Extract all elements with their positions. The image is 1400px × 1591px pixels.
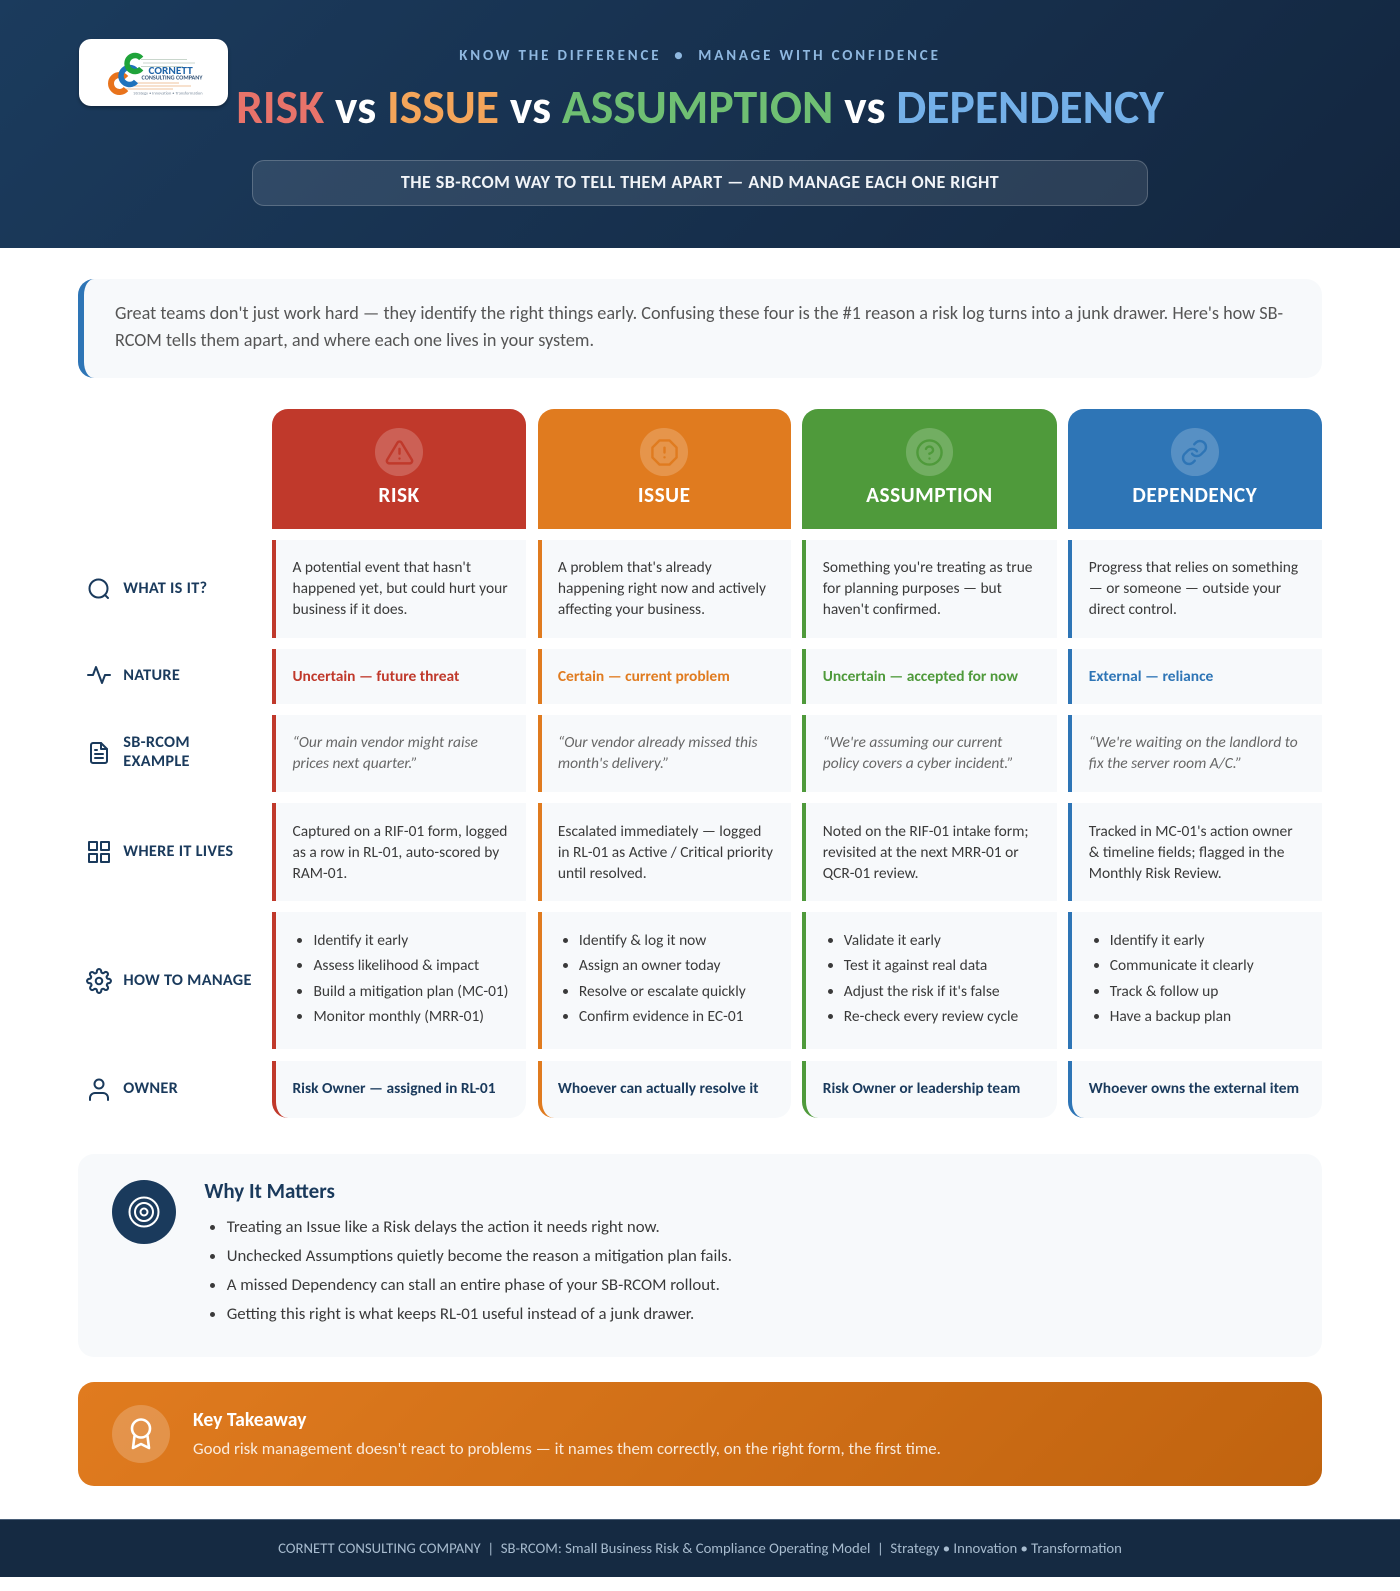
risk: how to manage: Assess likelihood & impact	[313, 956, 479, 975]
issue: owner	[538, 1061, 791, 1118]
issue: how to manage: Confirm evidence in EC-01	[579, 1007, 744, 1026]
assumption: how to manage: Adjust the risk if it's false	[844, 982, 1000, 1001]
heading: Why It Matters	[204, 1178, 335, 1204]
row label: Where it lives: WHERE IT LIVES	[123, 841, 233, 861]
row label: What is it?: WHAT IS IT?	[123, 578, 207, 598]
icon: document	[90, 742, 108, 764]
dependency: nature	[1068, 649, 1322, 704]
icon: target	[112, 1180, 176, 1244]
intro callout	[78, 278, 1322, 378]
risk: what is it	[272, 540, 526, 638]
dependency: nature: External — reliance	[1089, 667, 1213, 686]
assumption: where it lives: QCR-01 review.	[823, 864, 919, 883]
column header: Risk	[272, 408, 526, 529]
logo: Cornett Consulting Company: Strategy • Innovation • Transformation	[133, 92, 203, 96]
assumption: nature	[802, 649, 1057, 704]
row label: How to manage	[86, 968, 252, 994]
assumption: owner: Risk Owner or leadership team	[823, 1079, 1020, 1098]
assumption: what is it: haven't confirmed.	[823, 600, 941, 619]
row label: Where it lives	[88, 841, 233, 863]
dependency: example: “We're waiting on the landlord to	[1089, 733, 1298, 752]
icon: magnifier	[88, 578, 109, 599]
issue: how to manage: Identify & log it now	[579, 931, 706, 950]
assumption: where it lives: revisited at the next MRR-01 or	[823, 843, 1019, 862]
issue: example: “Our vendor already missed this	[558, 733, 758, 752]
dependency: how to manage: Have a backup plan	[1110, 1007, 1231, 1026]
issue: where it lives	[538, 803, 791, 901]
footer	[0, 1519, 1400, 1577]
row label: SB-RCOM example	[90, 732, 190, 771]
risk: owner	[272, 1061, 526, 1118]
panel: why it matters	[78, 1154, 1322, 1357]
issue: where it lives: in RL-01 as Active / Critical priority	[558, 843, 773, 862]
assumption: example: policy covers a cyber incident.”	[823, 754, 1014, 773]
dependency: where it lives: Tracked in MC-01's action owner	[1089, 822, 1293, 840]
heading: Key Takeaway	[193, 1408, 306, 1432]
dependency: what is it: — or someone — outside your	[1089, 579, 1281, 598]
risk: where it lives: as a row in RL-01, auto-scored by	[292, 843, 499, 862]
panel: key takeaway	[78, 1382, 1322, 1486]
issue: where it lives: Escalated immediately — logged	[558, 822, 761, 840]
dependency: where it lives: Monthly Risk Review.	[1089, 864, 1222, 883]
issue: nature	[538, 649, 791, 704]
icon: question circle	[906, 428, 953, 476]
assumption: what is it	[802, 540, 1057, 638]
assumption: what is it: Something you're treating as true	[823, 558, 1032, 577]
risk: what is it: A potential event that hasn't	[292, 558, 471, 577]
row label: SB-RCOM example: EXAMPLE	[123, 751, 190, 771]
bullet list	[210, 1216, 732, 1324]
dependency: where it lives	[1068, 803, 1322, 901]
risk: how to manage: Build a mitigation plan (MC-01)	[313, 982, 508, 1001]
dependency: owner	[1068, 1061, 1322, 1118]
header banner	[0, 0, 1400, 248]
icon: activity pulse	[87, 666, 111, 684]
row label: How to manage: HOW TO MANAGE	[123, 970, 252, 990]
assumption: how to manage: Test it against real data	[844, 956, 987, 975]
assumption: where it lives	[802, 803, 1057, 901]
risk: example: prices next quarter.”	[292, 754, 418, 773]
logo: Cornett Consulting Company	[78, 39, 228, 106]
issue: how to manage	[538, 912, 791, 1049]
issue: owner: Whoever can actually resolve it	[558, 1079, 758, 1098]
logo: Cornett Consulting Company: CORNETT	[148, 64, 193, 78]
assumption: example: “We're assuming our current	[823, 733, 1002, 752]
risk: how to manage: Monitor monthly (MRR-01)	[313, 1007, 484, 1026]
risk: what is it: happened yet, but could hurt your	[292, 579, 508, 598]
issue: what is it: affecting your business.	[558, 600, 705, 619]
assumption: where it lives: Noted on the RIF-01 intake form;	[823, 822, 1029, 840]
risk: example	[272, 715, 526, 792]
row label: Nature: NATURE	[123, 664, 180, 684]
icon: award ribbon	[112, 1405, 170, 1463]
assumption: how to manage: Re-check every review cycle	[844, 1007, 1018, 1026]
main title: RISK vs ISSUE vs ASSUMPTION vs DEPENDENCY	[236, 78, 1164, 136]
column header: Dependency	[1068, 408, 1322, 529]
assumption: how to manage	[802, 912, 1057, 1049]
row label: What is it?	[88, 578, 207, 599]
icon: warning triangle	[375, 428, 423, 476]
dependency: how to manage: Track & follow up	[1110, 982, 1218, 1001]
assumption: how to manage: Validate it early	[844, 931, 941, 950]
column header: Assumption	[802, 408, 1057, 529]
bullet list: Treating an Issue like a Risk delays the action it needs right now.	[227, 1216, 660, 1237]
bullet list: Unchecked Assumptions quietly become the reason a mitigation plan fails.	[227, 1245, 732, 1266]
dependency: example: fix the server room A/C.”	[1089, 754, 1242, 773]
dependency: what is it	[1068, 540, 1322, 638]
bullet list: Getting this right is what keeps RL-01 useful instead of a junk drawer.	[227, 1303, 694, 1324]
issue: how to manage: Assign an owner today	[579, 956, 720, 975]
assumption: nature: Uncertain — accepted for now	[823, 667, 1018, 686]
column header: Assumption: ASSUMPTION	[866, 482, 993, 508]
issue: nature: Certain — current problem	[558, 667, 730, 686]
risk: how to manage	[272, 912, 526, 1049]
dependency: what is it: Progress that relies on something	[1089, 558, 1298, 577]
icon: alert octagon	[640, 428, 688, 476]
kicker line: KNOW THE DIFFERENCE ● MANAGE WITH CONFIDENCE	[459, 47, 941, 65]
row label: Nature	[87, 664, 180, 684]
intro callout: Great teams don't just work hard — they identify the right things early. Confusing these four is the #1 reason a risk log turns into a junk drawer. Here's how SB-RCOM tells them apart, and where each one lives in your system.	[115, 302, 1283, 350]
icon: gear	[86, 968, 112, 994]
row label: SB-RCOM example: SB-RCOM	[123, 732, 190, 752]
subtitle pill: THE SB-RCOM WAY TO TELL THEM APART — AND MANAGE EACH ONE RIGHT	[401, 170, 999, 192]
dependency: owner: Whoever owns the external item	[1089, 1079, 1299, 1098]
risk: example: “Our main vendor might raise	[292, 733, 478, 752]
dependency: how to manage: Identify it early	[1110, 931, 1205, 950]
risk: nature	[272, 649, 526, 704]
risk: how to manage: Identify it early	[313, 931, 408, 950]
icon: person	[89, 1078, 109, 1101]
risk: where it lives	[272, 803, 526, 901]
assumption: owner	[802, 1061, 1057, 1118]
icon: grid	[88, 841, 110, 863]
logo: Cornett Consulting Company: CONSULTING COMPANY	[141, 74, 203, 82]
assumption: what is it: for planning purposes — but	[823, 579, 1002, 598]
dependency: how to manage: Communicate it clearly	[1110, 956, 1254, 975]
risk: where it lives: RAM-01.	[292, 864, 347, 883]
subtitle pill	[252, 160, 1148, 206]
assumption: example	[802, 715, 1057, 792]
risk: owner: Risk Owner — assigned in RL-01	[292, 1079, 496, 1098]
column header: Issue	[538, 408, 791, 529]
issue: what is it	[538, 540, 791, 638]
column header: Dependency: DEPENDENCY	[1132, 482, 1257, 508]
dependency: what is it: direct control.	[1089, 600, 1177, 619]
risk: what is it: business if it does.	[292, 600, 407, 619]
column header: Issue: ISSUE	[638, 482, 690, 508]
dependency: where it lives: & timeline fields; flagged in the	[1089, 843, 1284, 862]
takeaway text: Good risk management doesn't react to problems — it names them correctly, on the right form, the first time.	[193, 1438, 941, 1459]
dependency: how to manage	[1068, 912, 1322, 1049]
row label: Owner	[89, 1078, 178, 1101]
dependency: example	[1068, 715, 1322, 792]
row label: Owner: OWNER	[123, 1078, 178, 1098]
footer: CORNETT CONSULTING COMPANY | SB-RCOM: Small Business Risk & Compliance Operating Model | Strategy • Innovation • Transformation	[278, 1539, 1122, 1557]
issue: example: month's delivery.”	[558, 754, 669, 773]
bullet list: A missed Dependency can stall an entire phase of your SB-RCOM rollout.	[227, 1274, 720, 1295]
issue: example	[538, 715, 791, 792]
issue: what is it: happening right now and actively	[558, 579, 766, 598]
issue: what is it: A problem that's already	[558, 558, 712, 577]
issue: where it lives: until resolved.	[558, 864, 647, 883]
risk: nature: Uncertain — future threat	[292, 667, 459, 686]
issue: how to manage: Resolve or escalate quickly	[579, 982, 746, 1001]
column header: Risk: RISK	[378, 482, 420, 508]
icon: chain link	[1171, 428, 1219, 476]
risk: where it lives: Captured on a RIF-01 form, logged	[292, 822, 507, 840]
